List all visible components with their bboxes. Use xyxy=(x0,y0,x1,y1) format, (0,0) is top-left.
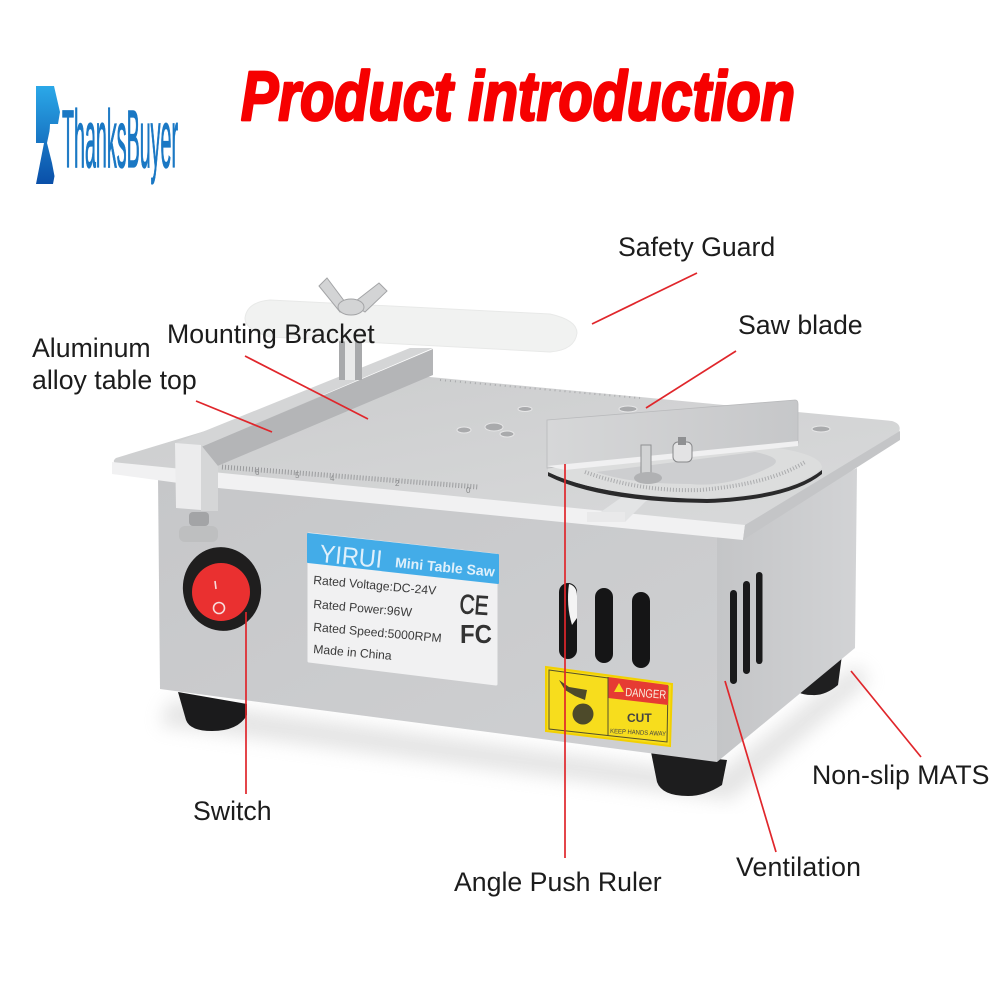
line: aluminum table top xyxy=(196,401,272,432)
ventilation: front slots xyxy=(559,583,650,668)
labels xyxy=(32,232,989,897)
line: mounting bracket xyxy=(245,356,368,419)
line: switch xyxy=(245,612,247,794)
line: ventilation xyxy=(725,681,776,852)
spec label: FC xyxy=(460,619,492,649)
blade slot xyxy=(595,497,650,522)
spec label: Rated Speed:5000RPM xyxy=(313,620,442,645)
label: safety guard: Safety Guard xyxy=(618,232,775,262)
label: switch: Switch xyxy=(193,796,272,826)
line: safety guard xyxy=(592,273,697,324)
table top surface xyxy=(114,372,900,526)
spec label: CE xyxy=(459,589,490,621)
angle push ruler: fence plate xyxy=(547,400,798,468)
spec label: Mini Table Saw xyxy=(394,554,496,580)
wing nut xyxy=(319,278,387,315)
fence bar xyxy=(175,348,433,470)
fence end block xyxy=(175,443,201,510)
danger label: DANGER xyxy=(625,685,667,702)
front ruler scale: 4 xyxy=(330,474,335,483)
danger label: CUT xyxy=(627,711,652,725)
line: non-slip mats xyxy=(851,671,921,757)
shadow under saw xyxy=(160,665,870,800)
spec label xyxy=(308,534,498,684)
table top right edge xyxy=(743,431,900,540)
label: non-slip mats: Non-slip MATS xyxy=(812,760,989,790)
saw product illustration xyxy=(112,278,900,800)
ventilation: right side slots xyxy=(730,572,762,684)
angle push ruler: plate lip xyxy=(547,441,798,470)
angle push ruler: thumb screw and nut xyxy=(634,437,692,484)
danger label xyxy=(546,667,672,746)
switch xyxy=(175,540,269,638)
body: right side face xyxy=(717,468,857,762)
spec label: Made in China xyxy=(313,642,392,663)
text: ThanksBuyer xyxy=(62,94,178,185)
front ruler scale: 5 xyxy=(295,471,300,480)
label: aluminum alloy table top: Aluminum xyxy=(32,333,151,363)
label: aluminum alloy table top: alloy table top xyxy=(32,365,197,395)
knurled knob xyxy=(179,512,218,542)
body: front face xyxy=(158,478,717,762)
spec label: Rated Power:96W xyxy=(313,597,413,620)
front ruler scale: 0 xyxy=(466,486,471,495)
front ruler scale xyxy=(222,467,478,495)
label: saw blade: Saw blade xyxy=(738,310,863,340)
front ruler scale: 6 xyxy=(255,468,260,477)
front ruler scale: 2 xyxy=(395,479,400,488)
label: aluminum alloy table top xyxy=(32,333,197,395)
foot: right xyxy=(798,655,842,695)
back ruler scale xyxy=(440,380,640,398)
title: Product introduction xyxy=(241,57,795,135)
label: mounting bracket: Mounting Bracket xyxy=(167,319,375,349)
foot: middle xyxy=(651,752,727,796)
label: angle push ruler: Angle Push Ruler xyxy=(454,867,662,897)
spec label: Rated Voltage:DC-24V xyxy=(313,573,438,598)
danger label: KEEP HANDS AWAY xyxy=(610,728,667,738)
callout lines xyxy=(196,273,921,858)
line: angle push ruler xyxy=(564,464,566,858)
post xyxy=(339,340,362,380)
label: ventilation: Ventilation xyxy=(736,852,861,882)
line: saw blade xyxy=(646,351,736,408)
table holes xyxy=(457,406,830,437)
spec label: YIRUI xyxy=(318,540,384,574)
angle push ruler: dial xyxy=(548,448,822,503)
table top front edge xyxy=(112,462,745,540)
foot: left xyxy=(178,692,247,731)
logo: ThanksBuyer xyxy=(36,86,178,185)
safety guard: translucent plate xyxy=(245,300,577,352)
